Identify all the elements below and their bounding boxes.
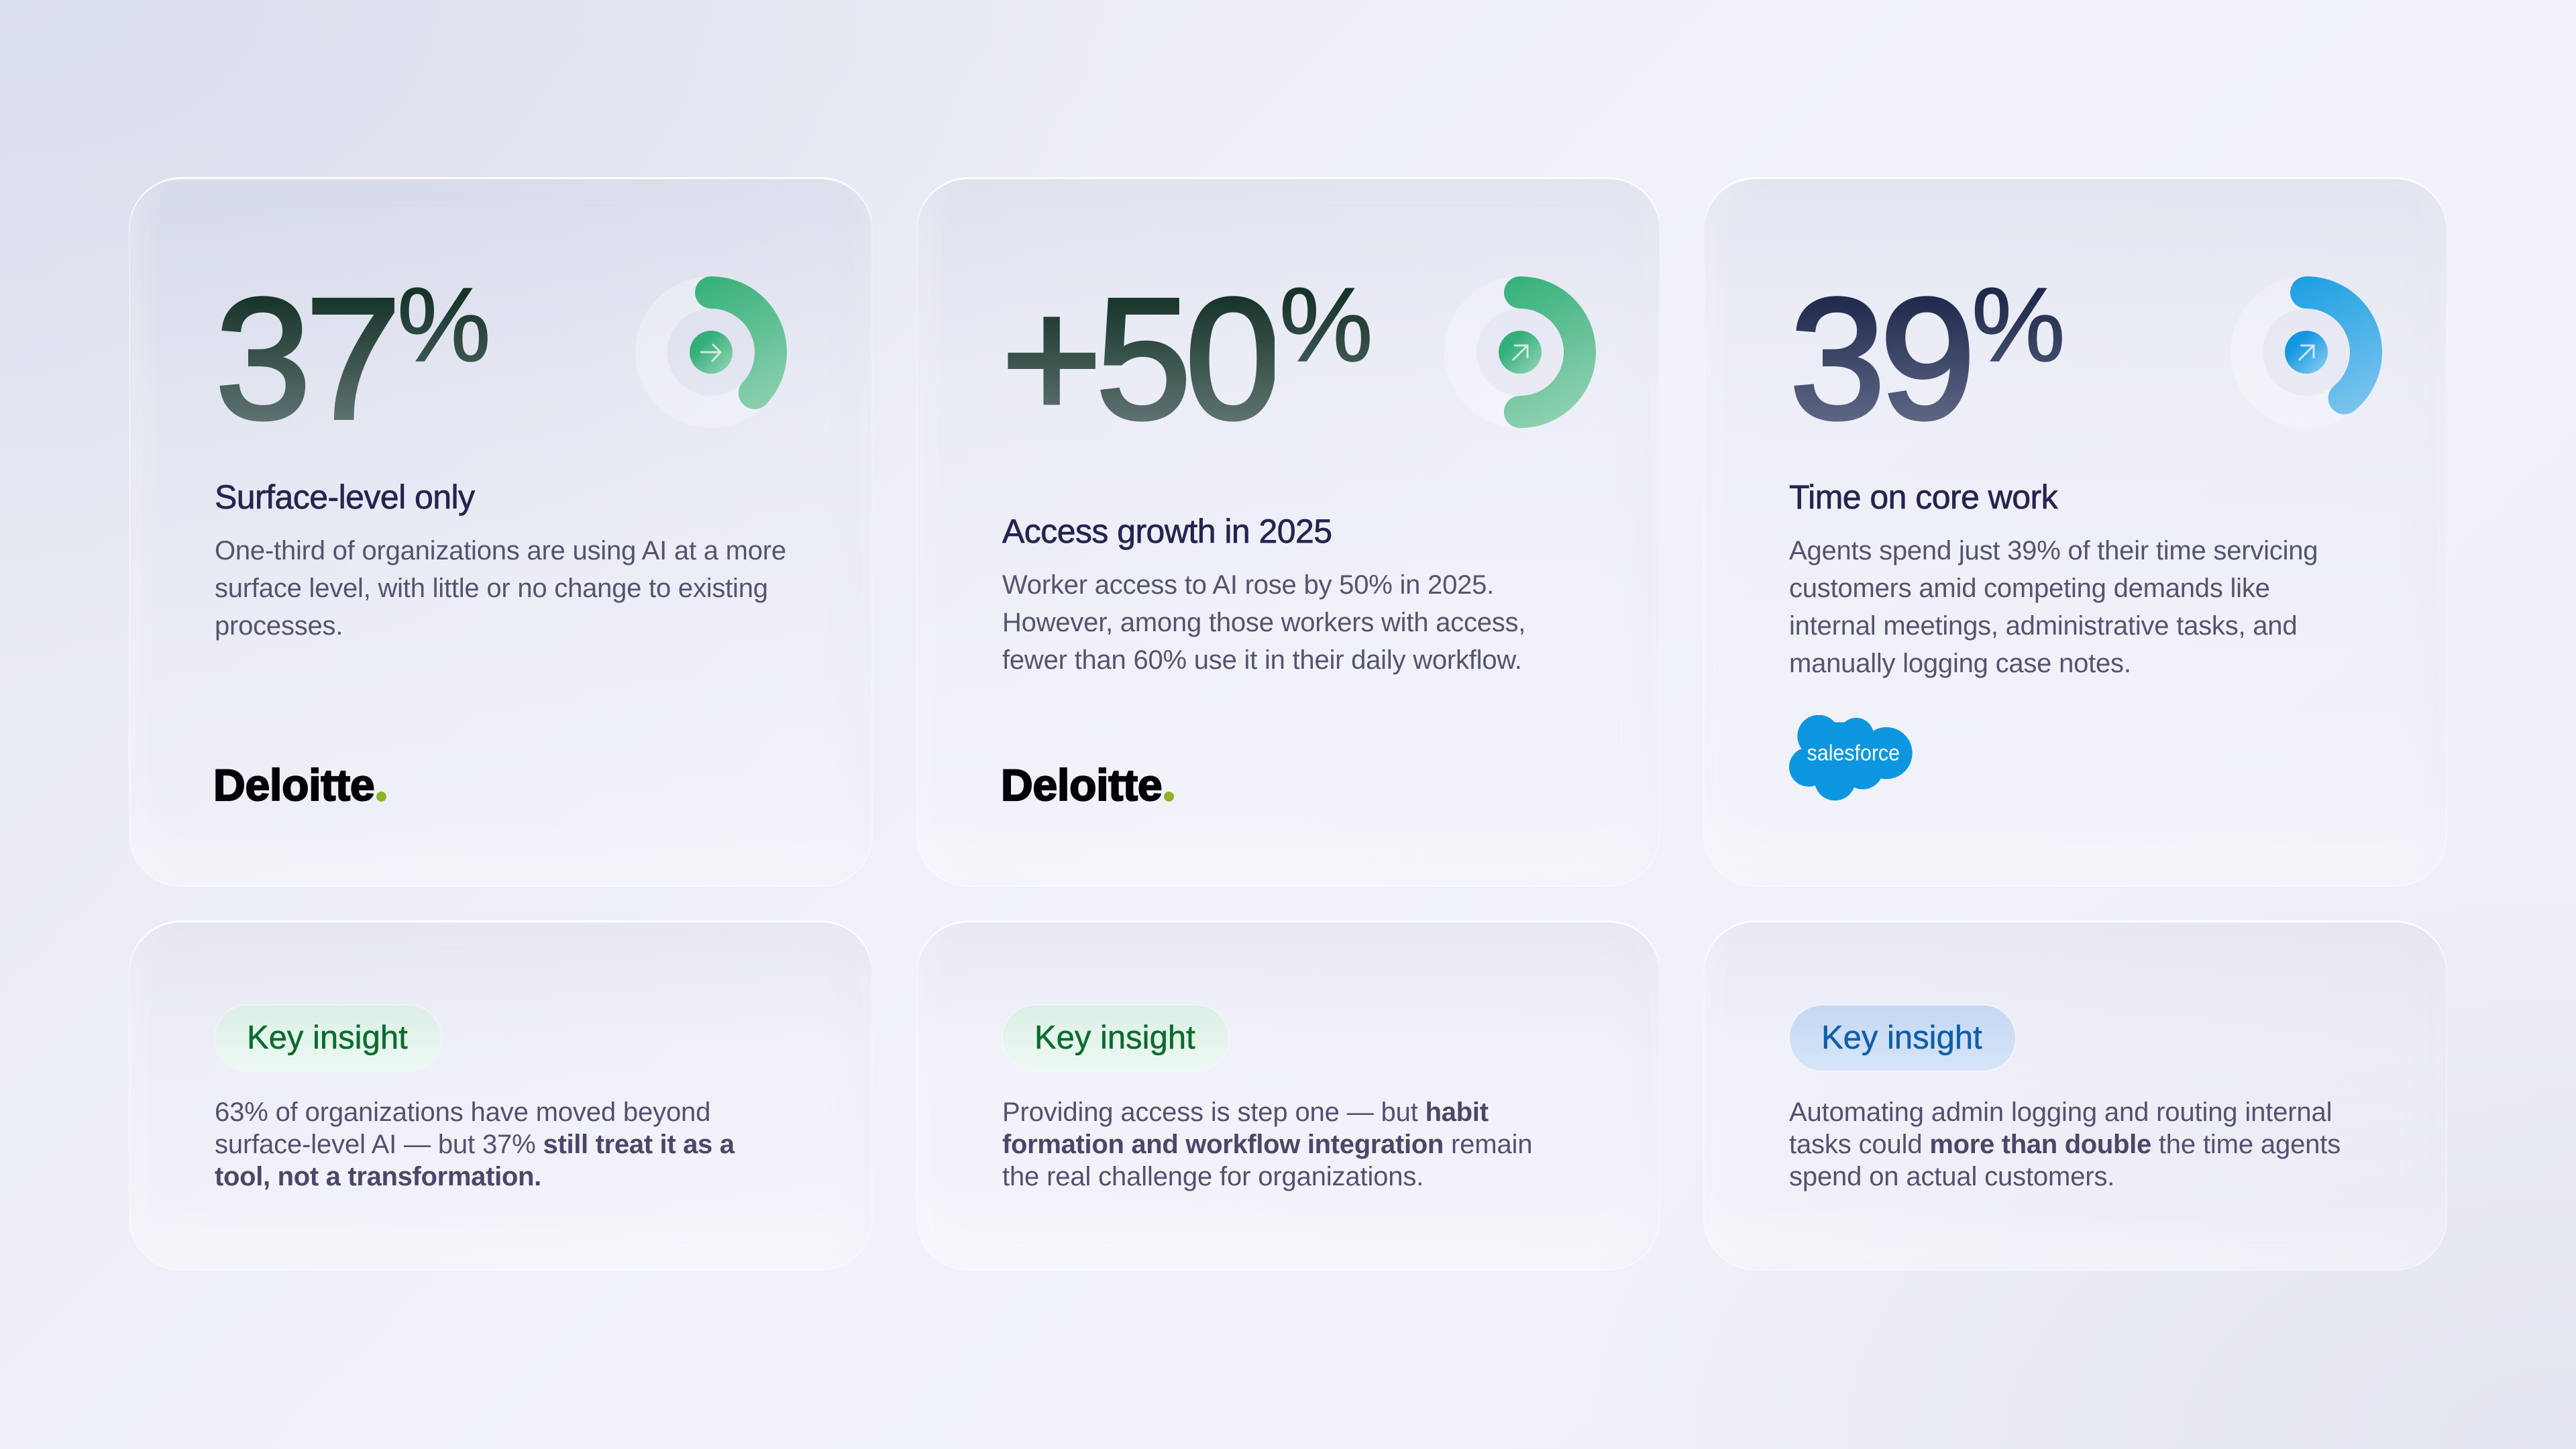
heading: Access growth in 2025 [1002, 513, 1332, 550]
description: internal meetings, administrative tasks, and [1789, 611, 2297, 641]
heading: Time on core work [1789, 478, 2057, 516]
description [1002, 570, 1525, 675]
stat card: 39 percent time on core work [1703, 177, 2447, 887]
logo: Deloitte: Deloitte [1001, 760, 1162, 810]
description: surface level, with little or no change to existing [215, 574, 768, 603]
key insight pill [215, 1006, 441, 1071]
description: customers amid competing demands like [1789, 574, 2270, 603]
insight text: surface-level AI — but 37% still treat it as a [215, 1130, 735, 1159]
insight text: Providing access is step one — but habit [1002, 1097, 1489, 1127]
big number 37: 37 [215, 263, 396, 455]
percent sign: % [397, 266, 491, 384]
description [1789, 536, 2318, 678]
description: manually logging case notes. [1789, 649, 2131, 678]
description: processes. [215, 611, 343, 641]
description [215, 536, 786, 641]
insight text [1789, 1097, 2341, 1191]
key insight pill: Key insight [1821, 1020, 1982, 1056]
heading: Surface-level only [215, 478, 475, 516]
big number +50: +50 [1002, 263, 1275, 455]
percent sign: % [1972, 266, 2065, 384]
insight card: habit formation [916, 920, 1660, 1271]
description: One-third of organizations are using AI at a more [215, 536, 786, 566]
key insight pill [1790, 1006, 2015, 1071]
percent sign: % [1279, 266, 1373, 384]
logo: Salesforce cloud [1789, 715, 1913, 801]
insight text: 63% of organizations have moved beyond [215, 1097, 710, 1127]
insight text: formation and workflow integration remain [1002, 1130, 1532, 1159]
big number 39: 39 [1790, 263, 1970, 455]
donut chart: 37 percent [636, 276, 787, 409]
insight text [215, 1097, 735, 1191]
insight text: the real challenge for organizations. [1002, 1162, 1424, 1191]
insight text: tool, not a transformation. [215, 1162, 541, 1191]
logo: Deloitte: Deloitte [213, 760, 374, 810]
insight text [1002, 1097, 1532, 1191]
insight card: surface-level AI [129, 920, 873, 1271]
stat card: plus 50 percent access growth [916, 177, 1660, 887]
description: Worker access to AI rose by 50% in 2025. [1002, 570, 1494, 600]
insight text: Automating admin logging and routing internal [1789, 1097, 2332, 1127]
insight card: automating admin [1703, 920, 2447, 1271]
key insight pill: Key insight [247, 1020, 408, 1056]
donut chart: 39 percent [2285, 276, 2382, 415]
stat card: 37 percent surface-level only [129, 177, 873, 887]
insight text: tasks could more than double the time agents [1789, 1130, 2341, 1159]
insight text: spend on actual customers. [1789, 1162, 2114, 1191]
description: fewer than 60% use it in their daily workflow. [1002, 645, 1522, 675]
description: Agents spend just 39% of their time servicing [1789, 536, 2318, 566]
donut chart: 50 percent [1499, 276, 1596, 428]
logo: Salesforce cloud: salesforce [1807, 741, 1900, 765]
key insight pill [1003, 1006, 1228, 1071]
key insight pill: Key insight [1034, 1020, 1195, 1056]
description: However, among those workers with access, [1002, 608, 1525, 637]
